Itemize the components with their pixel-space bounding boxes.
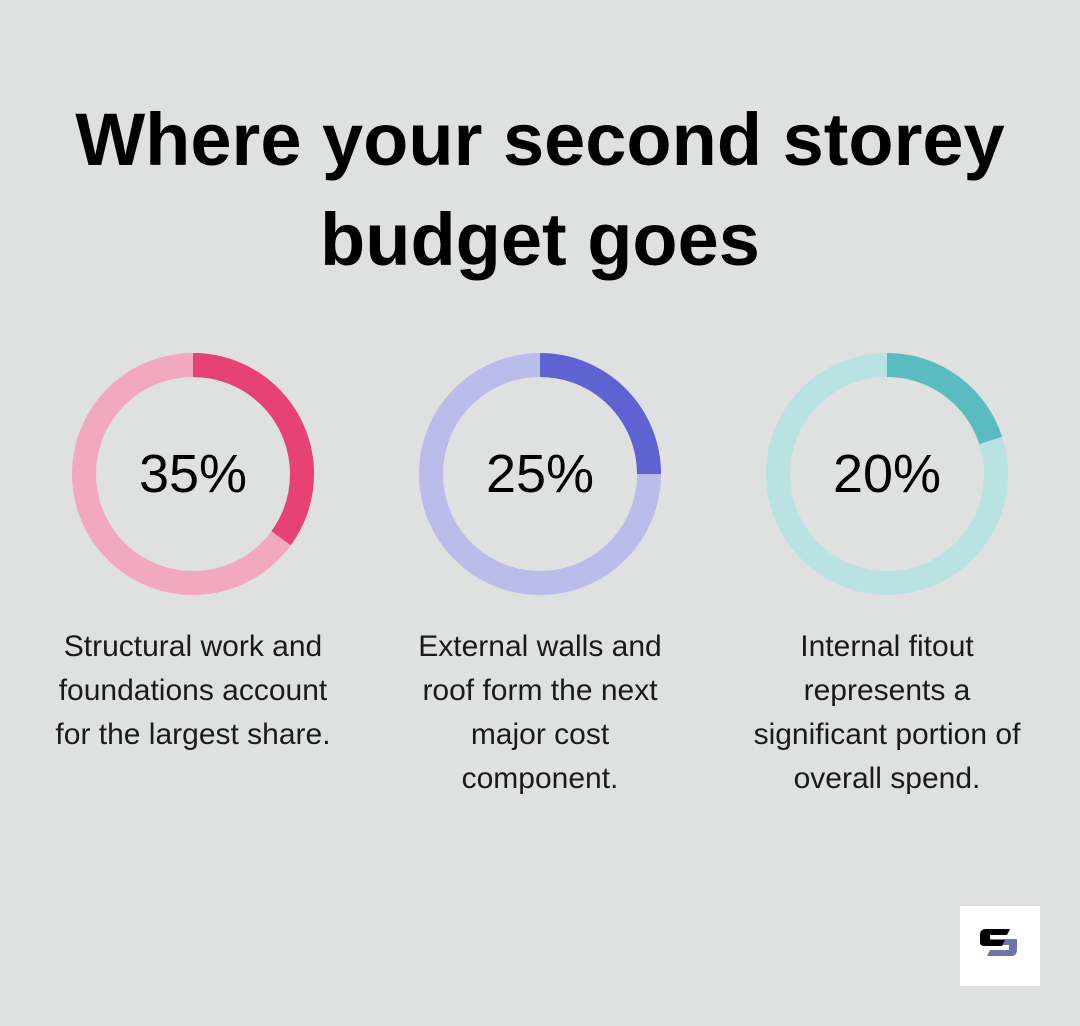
- text: structural: Structural work and foundations account for the largest share.: [55, 630, 331, 751]
- donut: 35%: [72, 353, 314, 595]
- donut: 25%: 25%: [486, 444, 594, 504]
- logo: [960, 906, 1040, 986]
- title: [75, 98, 1005, 281]
- donut: 35%: 35%: [139, 444, 247, 504]
- text: internal: Internal fitout represents a significant portion of overall spend.: [754, 630, 1020, 795]
- title: Where your second storey: [75, 98, 1005, 181]
- title: budget goes: [320, 198, 760, 281]
- text: external: External walls and roof form the next major cost component.: [418, 630, 662, 795]
- donut: 20%: 20%: [833, 444, 941, 504]
- donut: 20%: [766, 353, 1008, 595]
- donut: 25%: [419, 353, 661, 595]
